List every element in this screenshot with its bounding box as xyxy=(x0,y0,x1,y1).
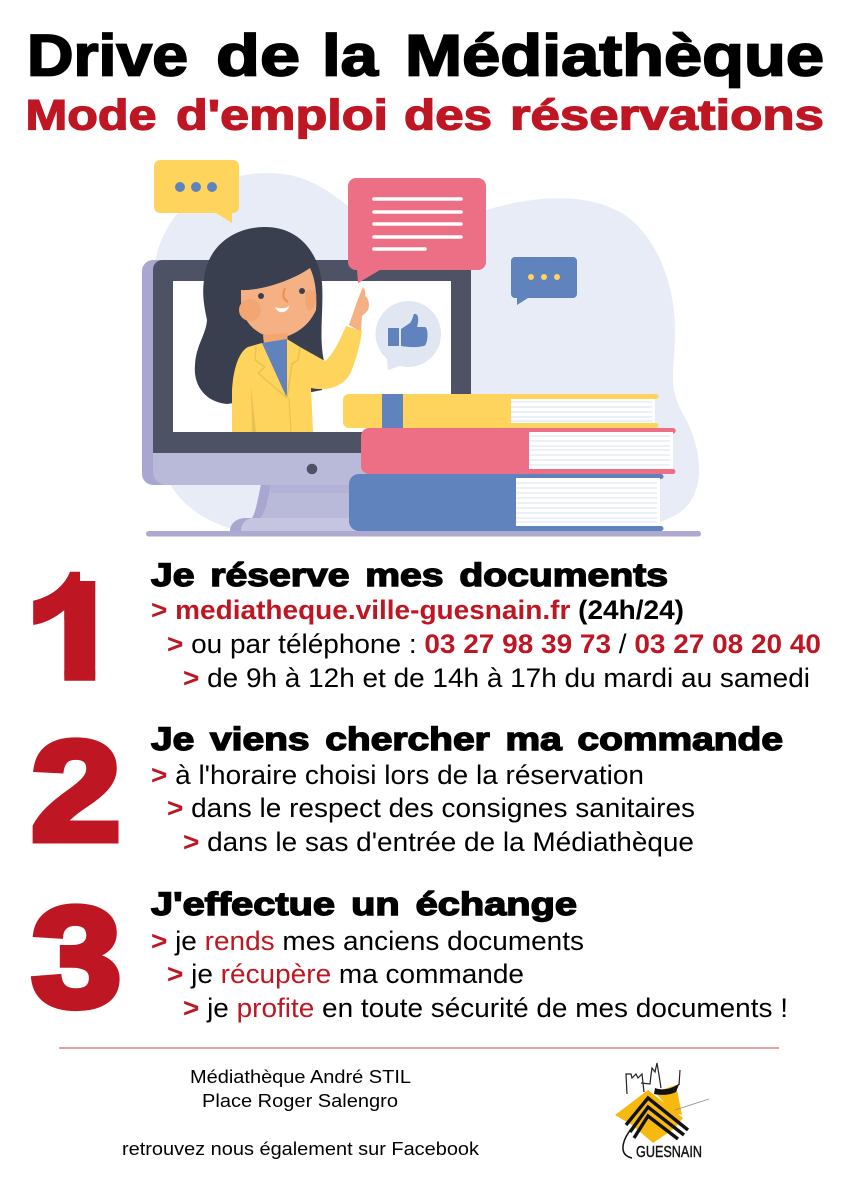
person xyxy=(195,227,369,432)
step 3 text xyxy=(151,926,788,1023)
step 3 text: > je récupère ma commande xyxy=(167,959,524,989)
step 2 number: 2 xyxy=(31,712,121,871)
footer address: retrouvez nous également sur Facebook xyxy=(122,1139,480,1159)
background blob xyxy=(155,173,699,530)
footer address: Place Roger Salengro xyxy=(202,1091,398,1111)
title: de xyxy=(216,24,300,88)
step 2 text: > dans le respect des consignes sanitaires xyxy=(167,793,695,823)
footer address xyxy=(122,1067,480,1159)
subtitle: des xyxy=(404,92,492,140)
floor line xyxy=(146,531,701,536)
icon: pink speech bubble xyxy=(348,178,486,283)
step 1 number: 1 xyxy=(22,554,127,717)
step 3 text: > je rends mes anciens documents xyxy=(151,926,584,956)
title xyxy=(27,24,824,88)
step 2 text: > à l'horaire choisi lors de la réservation xyxy=(151,760,644,790)
footer address: Médiathèque André STIL xyxy=(190,1067,411,1087)
step 1 text: > ou par téléphone : 03 27 98 39 73 / 03 27 08 20 40 xyxy=(167,629,821,659)
step 3 number: 3 xyxy=(32,878,122,1037)
title: Médiathèque xyxy=(405,24,824,88)
book stack xyxy=(343,394,676,531)
subtitle xyxy=(26,92,824,140)
monitor xyxy=(142,260,471,531)
subtitle: d'emploi xyxy=(176,92,388,140)
title: Drive xyxy=(27,24,188,88)
logo: Guesnain xyxy=(615,1063,709,1161)
icon: thumbs up bubble xyxy=(376,301,441,370)
step 1 text: > de 9h à 12h et de 14h à 17h du mardi au samedi xyxy=(183,663,810,693)
step 2 text xyxy=(151,760,695,857)
step 2 heading: Je viens chercher ma commande xyxy=(151,721,783,757)
icon: blue speech bubble xyxy=(511,257,577,305)
subtitle: Mode xyxy=(26,92,156,140)
step 1 heading: Je réserve mes documents xyxy=(151,557,668,593)
title: la xyxy=(322,24,379,88)
step 1 text xyxy=(151,595,821,693)
subtitle: réservations xyxy=(510,92,824,140)
logo: Guesnain: GUESNAIN xyxy=(636,1144,702,1161)
step 3 heading: J'effectue un échange xyxy=(151,886,577,922)
step 1 number xyxy=(33,572,96,681)
illustration: librarian on monitor with books xyxy=(142,160,701,536)
step 1 text: > mediatheque.ville-guesnain.fr (24h/24) xyxy=(151,595,684,625)
step 3 text: > je profite en toute sécurité de mes documents ! xyxy=(183,993,788,1023)
icon: yellow speech bubble xyxy=(154,160,239,223)
step 2 text: > dans le sas d'entrée de la Médiathèque xyxy=(183,827,694,857)
